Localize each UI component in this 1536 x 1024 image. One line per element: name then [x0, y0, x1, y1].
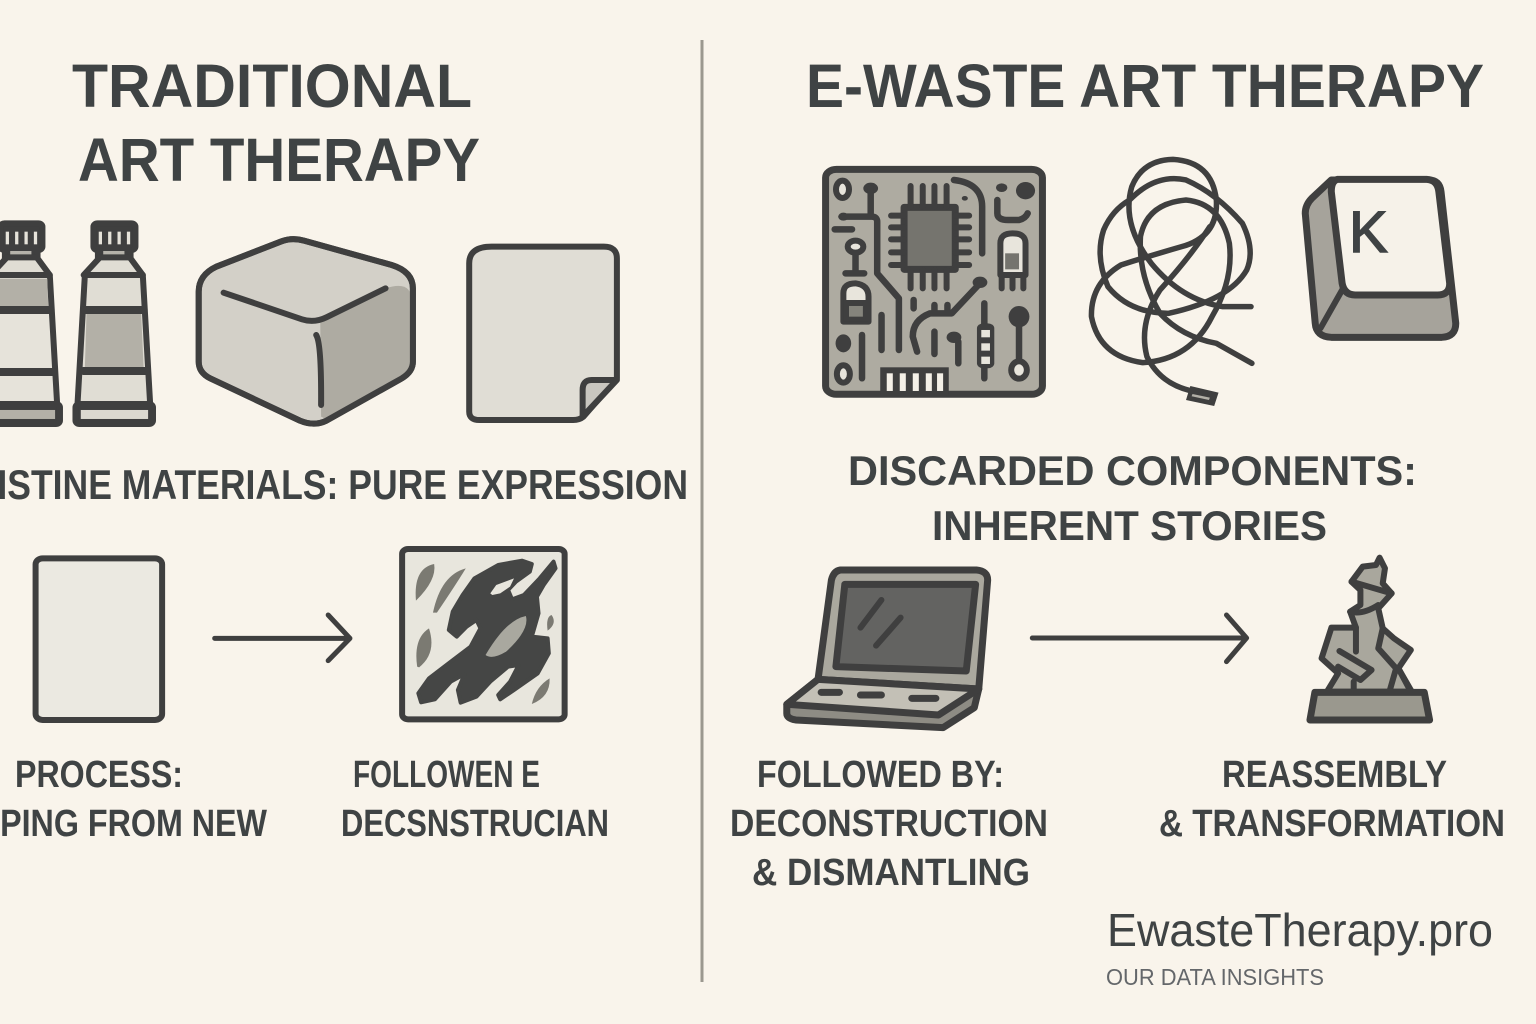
label: reassembly and transformation: REASSEMBLY — [1222, 754, 1447, 796]
icon: laptop — [787, 570, 988, 728]
label: process shaping from new: PROCESS: — [15, 754, 183, 796]
icon: circuit board — [826, 169, 1042, 395]
label: followed by deconstruction and dismantling: & DISMANTLING — [752, 852, 1030, 894]
brand: ewastetherapy.pro: EwasteTherapy.pro — [1107, 904, 1493, 956]
icon: blank canvas — [36, 558, 162, 720]
panel: traditional art therapy — [0, 52, 688, 845]
icon: abstract painting — [402, 549, 565, 719]
subheading: discarded components: INHERENT STORIES — [932, 502, 1327, 549]
label: followed by deconstruction and dismantling: FOLLOWED BY: — [757, 754, 1004, 796]
icon: paint tubes — [0, 223, 153, 424]
icon: keyboard key — [1305, 179, 1456, 337]
arrow: canvas to painting — [215, 615, 350, 661]
brand: ewastetherapy.pro: OUR DATA INSIGHTS — [1106, 964, 1324, 990]
icon: clay cube — [199, 239, 413, 424]
brand: ewastetherapy.pro — [1106, 904, 1493, 990]
label: followed by deconstruction and dismantling: DECONSTRUCTION — [730, 803, 1048, 845]
label: reassembly and transformation — [1159, 754, 1505, 845]
heading: e-waste art therapy: E-WASTE ART THERAPY — [806, 52, 1484, 120]
icon: tangled cable — [1091, 159, 1252, 406]
subheading: discarded components — [848, 447, 1417, 549]
heading: traditional art therapy: TRADITIONAL — [72, 52, 472, 120]
arrow: laptop to sculpture — [1032, 615, 1247, 662]
icon: reassembled sculpture — [1310, 558, 1430, 720]
label: followed by deconstruction: FOLLOWEN E — [353, 754, 540, 796]
label: process shaping from new — [0, 754, 267, 845]
label: followed by deconstruction: DECSNSTRUCIAN — [341, 803, 609, 845]
subheading: discarded components: DISCARDED COMPONENTS: — [848, 447, 1417, 494]
icon: blank paper with folded corner — [469, 247, 617, 420]
label: followed by deconstruction — [341, 754, 609, 845]
panel: e-waste art therapy — [730, 52, 1505, 990]
label: followed by deconstruction and dismantling — [730, 754, 1048, 894]
keycap letter: K — [1349, 200, 1388, 265]
heading: traditional art therapy — [72, 52, 480, 194]
heading: traditional art therapy: ART THERAPY — [78, 126, 480, 194]
